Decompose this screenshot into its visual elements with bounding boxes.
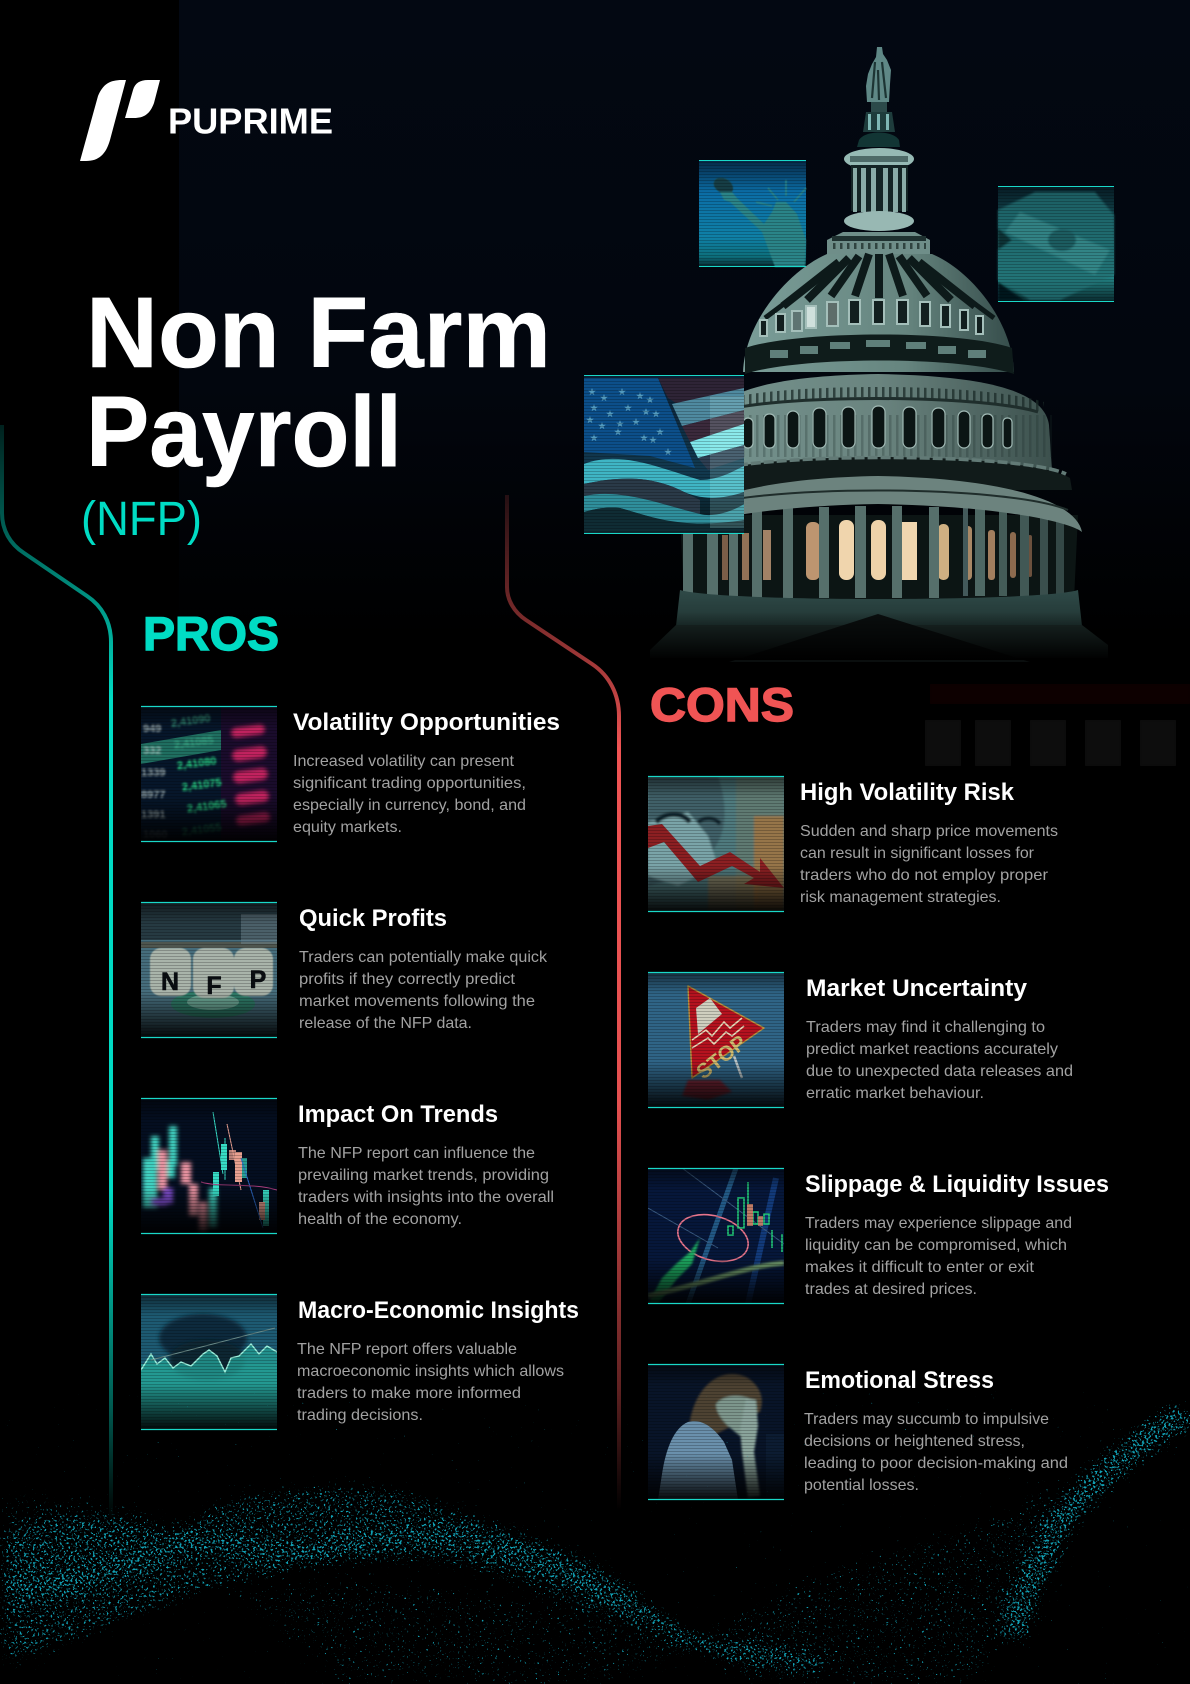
item body: profits if they correctly predict xyxy=(299,971,516,988)
item body: risk management strategies. xyxy=(800,889,1001,906)
upper drum with arched windows xyxy=(695,374,1072,490)
thumbnail: price table: 1339 xyxy=(141,767,165,779)
item body: erratic market behaviour. xyxy=(806,1085,984,1102)
cons connector line xyxy=(507,495,619,1510)
item body: makes it difficult to enter or exit xyxy=(805,1259,1035,1276)
logo wordmark: PUPRIME xyxy=(168,100,333,142)
item body: especially in currency, bond, and xyxy=(293,797,526,814)
logo mark xyxy=(80,80,160,161)
cons item: emotional stress xyxy=(648,1364,1068,1500)
item body: The NFP report offers valuable xyxy=(297,1341,517,1358)
item body: can result in significant losses for xyxy=(800,845,1035,862)
item body: market movements following the xyxy=(299,993,535,1010)
thumbnail: price table: 332 xyxy=(143,745,161,757)
pros item: quick profits xyxy=(141,902,548,1038)
photo: statue of liberty xyxy=(699,160,806,267)
thumbnail: price table: 2,41075 xyxy=(181,777,222,794)
thumbnail: price table: 2,41055 xyxy=(181,821,222,839)
statue and pedestal xyxy=(857,47,900,147)
ground fade xyxy=(600,612,1190,660)
title: Payroll xyxy=(86,376,402,488)
thumbnail: NFP dice xyxy=(141,902,277,1038)
thumbnail: chart with circled dip xyxy=(648,1168,784,1304)
item body: liquidity can be compromised, which xyxy=(805,1237,1067,1254)
item body: The NFP report can influence the xyxy=(298,1145,535,1162)
item body: potential losses. xyxy=(804,1477,919,1494)
thumbnail: banknote with falling arrow xyxy=(648,776,784,912)
cons item: high volatility risk xyxy=(648,776,1058,912)
item body xyxy=(804,1411,1068,1494)
lantern tholos xyxy=(827,148,930,254)
thumbnail rules xyxy=(141,1294,277,1430)
drum cornice xyxy=(676,476,1082,532)
particle wave xyxy=(0,1412,1190,1684)
thumbnail: NFP dice: F xyxy=(206,972,222,1000)
item body: traders who do not employ proper xyxy=(800,867,1049,884)
title: (NFP) xyxy=(81,493,202,546)
thumbnail: price table: 1391 xyxy=(141,809,165,821)
pros item: impact on trends xyxy=(141,1098,554,1234)
item body: trading decisions. xyxy=(297,1407,423,1424)
pros heading: PROS xyxy=(143,607,279,660)
pros item: volatility opportunities xyxy=(141,706,560,842)
thumbnail: price table xyxy=(141,706,277,842)
item body xyxy=(298,1145,554,1228)
item heading: Slippage & Liquidity Issues xyxy=(805,1171,1109,1198)
item body: significant trading opportunities, xyxy=(293,775,526,792)
item body: predict market reactions accurately xyxy=(806,1041,1058,1058)
thumbnail rules xyxy=(648,776,784,912)
capitol building xyxy=(600,47,1190,766)
title xyxy=(81,277,551,546)
item heading: High Volatility Risk xyxy=(800,779,1015,806)
title: Non Farm xyxy=(86,277,551,389)
item body xyxy=(299,949,548,1032)
thumbnail: price table: 2,41085 xyxy=(173,734,214,752)
thumbnail: price table: 8977 xyxy=(141,789,165,801)
item body xyxy=(293,753,526,836)
thumbnail: flooded stop sign: STOP xyxy=(692,1031,751,1084)
item body: macroeconomic insights which allows xyxy=(297,1363,564,1380)
thumbnail rules xyxy=(141,1098,277,1234)
item body: Traders may experience slippage and xyxy=(805,1215,1072,1232)
item body: traders with insights into the overall xyxy=(298,1189,554,1206)
thumbnail: price table: 1060 xyxy=(143,829,167,841)
item heading: Emotional Stress xyxy=(805,1367,994,1394)
thumbnail: stressed woman xyxy=(648,1364,784,1500)
item heading: Quick Profits xyxy=(299,905,447,932)
colonnade with lit windows xyxy=(680,506,1078,600)
thumbnail rules xyxy=(648,1364,784,1500)
thumbnail: flooded stop sign xyxy=(648,972,784,1108)
logo xyxy=(80,80,333,161)
thumbnail: price table: 2,41080 xyxy=(176,755,217,772)
item body xyxy=(297,1341,564,1424)
item heading: Macro-Economic Insights xyxy=(298,1297,579,1324)
thumbnail rules xyxy=(648,972,784,1108)
photo: american flag xyxy=(584,375,744,534)
item body: release of the NFP data. xyxy=(299,1015,472,1032)
item body: Increased volatility can present xyxy=(293,753,515,770)
thumbnail: candle chart xyxy=(141,1098,277,1234)
faint lower building xyxy=(925,684,1190,766)
item body: equity markets. xyxy=(293,819,402,836)
dome xyxy=(743,254,1014,374)
thumbnail rules xyxy=(648,1168,784,1304)
item body: due to unexpected data releases and xyxy=(806,1063,1073,1080)
item body: decisions or heightened stress, xyxy=(804,1433,1025,1450)
item heading: Volatility Opportunities xyxy=(293,709,560,736)
item body: Traders may succumb to impulsive xyxy=(804,1411,1049,1428)
thumbnail: price table: 2,41090 xyxy=(170,712,211,730)
photo: dollar bills xyxy=(998,186,1114,302)
item heading: Market Uncertainty xyxy=(806,975,1028,1002)
item body: Sudden and sharp price movements xyxy=(800,823,1058,840)
lower plinth xyxy=(650,625,1108,658)
thumbnail: banknote eye with chart xyxy=(141,1294,277,1430)
item body: leading to poor decision-making and xyxy=(804,1455,1068,1472)
thumbnail: NFP dice: N xyxy=(161,968,179,996)
dome window ring xyxy=(760,300,983,336)
thumbnail rules xyxy=(141,706,277,842)
pros connector line xyxy=(2,425,111,1520)
thumbnail: NFP dice: P xyxy=(250,966,266,994)
pros item: macro-economic insights xyxy=(141,1294,579,1430)
item body xyxy=(806,1019,1073,1102)
item body: Traders may find it challenging to xyxy=(806,1019,1045,1036)
item body: prevailing market trends, providing xyxy=(298,1167,549,1184)
item body xyxy=(800,823,1058,906)
thumbnail rules xyxy=(141,902,277,1038)
item heading: Impact On Trends xyxy=(298,1101,498,1128)
drum base xyxy=(676,590,1082,636)
item body: health of the economy. xyxy=(298,1211,462,1228)
item body xyxy=(805,1215,1072,1298)
thumbnail: price table: 949 xyxy=(143,723,161,735)
item body: traders to make more informed xyxy=(297,1385,521,1402)
cons item: slippage and liquidity issues xyxy=(648,1168,1109,1304)
cons item: market uncertainty xyxy=(648,972,1073,1108)
item body: trades at desired prices. xyxy=(805,1281,977,1298)
item body: Traders can potentially make quick xyxy=(299,949,548,966)
cons heading: CONS xyxy=(650,678,794,731)
pediment xyxy=(729,614,1030,662)
thumbnail: price table: 2,41065 xyxy=(186,798,227,816)
